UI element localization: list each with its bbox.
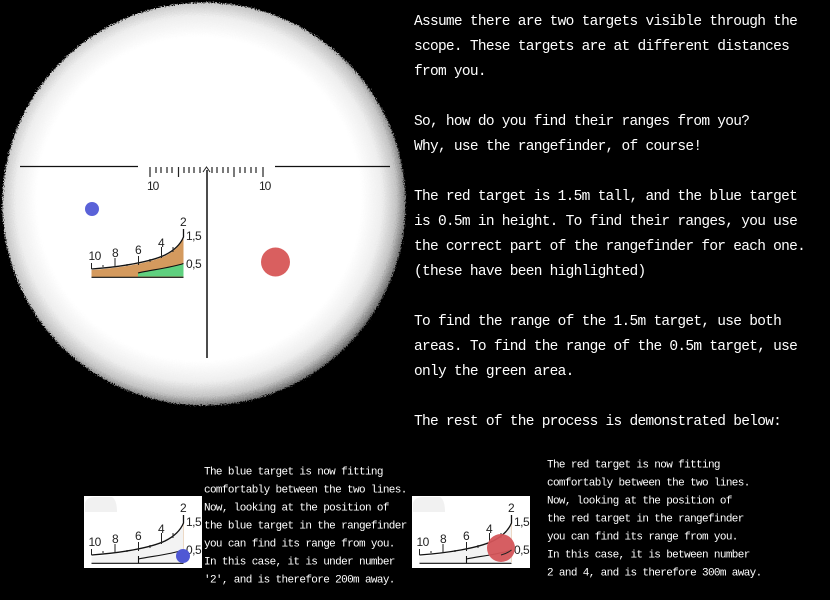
red target caption: you can find its range from you. <box>547 532 738 544</box>
explanation text: (these have been highlighted) <box>414 264 645 280</box>
blue target caption: The blue target is now fitting <box>204 466 383 478</box>
red target on rangefinder <box>487 534 515 562</box>
blue target caption: Now, looking at the position of <box>204 502 389 514</box>
blue target caption: the blue target in the rangefinder <box>204 520 407 532</box>
crosshair reticle: 10 <box>147 179 160 193</box>
explanation text: the correct part of the rangefinder for each one. <box>414 239 805 255</box>
explanation text: is 0.5m in height. To find their ranges, you use <box>414 214 797 230</box>
explanation text: So, how do you find their ranges from you? <box>414 114 749 130</box>
explanation text: Assume there are two targets visible through the <box>414 14 797 30</box>
faint blob <box>413 497 445 512</box>
faint blob <box>85 497 117 512</box>
scope lens circle <box>2 2 406 406</box>
orange area <box>92 238 184 277</box>
blue target caption: In this case, it is under number <box>204 556 395 568</box>
crosshair reticle: 10 <box>259 179 272 193</box>
blue target <box>85 202 99 216</box>
blue target caption: you can find its range from you. <box>204 538 395 550</box>
red target <box>261 248 290 276</box>
explanation text: The rest of the process is demonstrated below: <box>414 414 781 430</box>
blue target on rangefinder <box>176 549 190 563</box>
red target caption: The red target is now fitting <box>547 460 720 472</box>
explanation text: The red target is 1.5m tall, and the blue target <box>414 189 797 205</box>
explanation text: from you. <box>414 64 486 80</box>
scope view <box>2 2 406 406</box>
panel: blue target example <box>84 496 202 568</box>
highlighted rangefinder <box>88 215 202 277</box>
red target caption: Now, looking at the position of <box>547 496 732 508</box>
explanation text: scope. These targets are at different distances <box>414 39 789 55</box>
explanation text: only the green area. <box>414 364 574 380</box>
red target caption: the red target in the rangefinder <box>547 514 744 526</box>
explanation text: Why, use the rangefinder, of course! <box>414 139 701 155</box>
panel: red target example <box>412 496 530 568</box>
red target caption: comfortably between the two lines. <box>547 478 750 490</box>
red target caption: 2 and 4, and is therefore 300m away. <box>547 568 762 580</box>
green area <box>138 264 184 276</box>
red target caption: In this case, it is between number <box>547 550 750 562</box>
blue target caption: comfortably between the two lines. <box>204 484 407 496</box>
blue target caption: '2', and is therefore 200m away. <box>204 574 395 586</box>
explanation text: To find the range of the 1.5m target, use both <box>414 314 781 330</box>
explanation text: areas. To find the range of the 0.5m target, use <box>414 339 797 355</box>
crosshair reticle <box>20 166 390 358</box>
